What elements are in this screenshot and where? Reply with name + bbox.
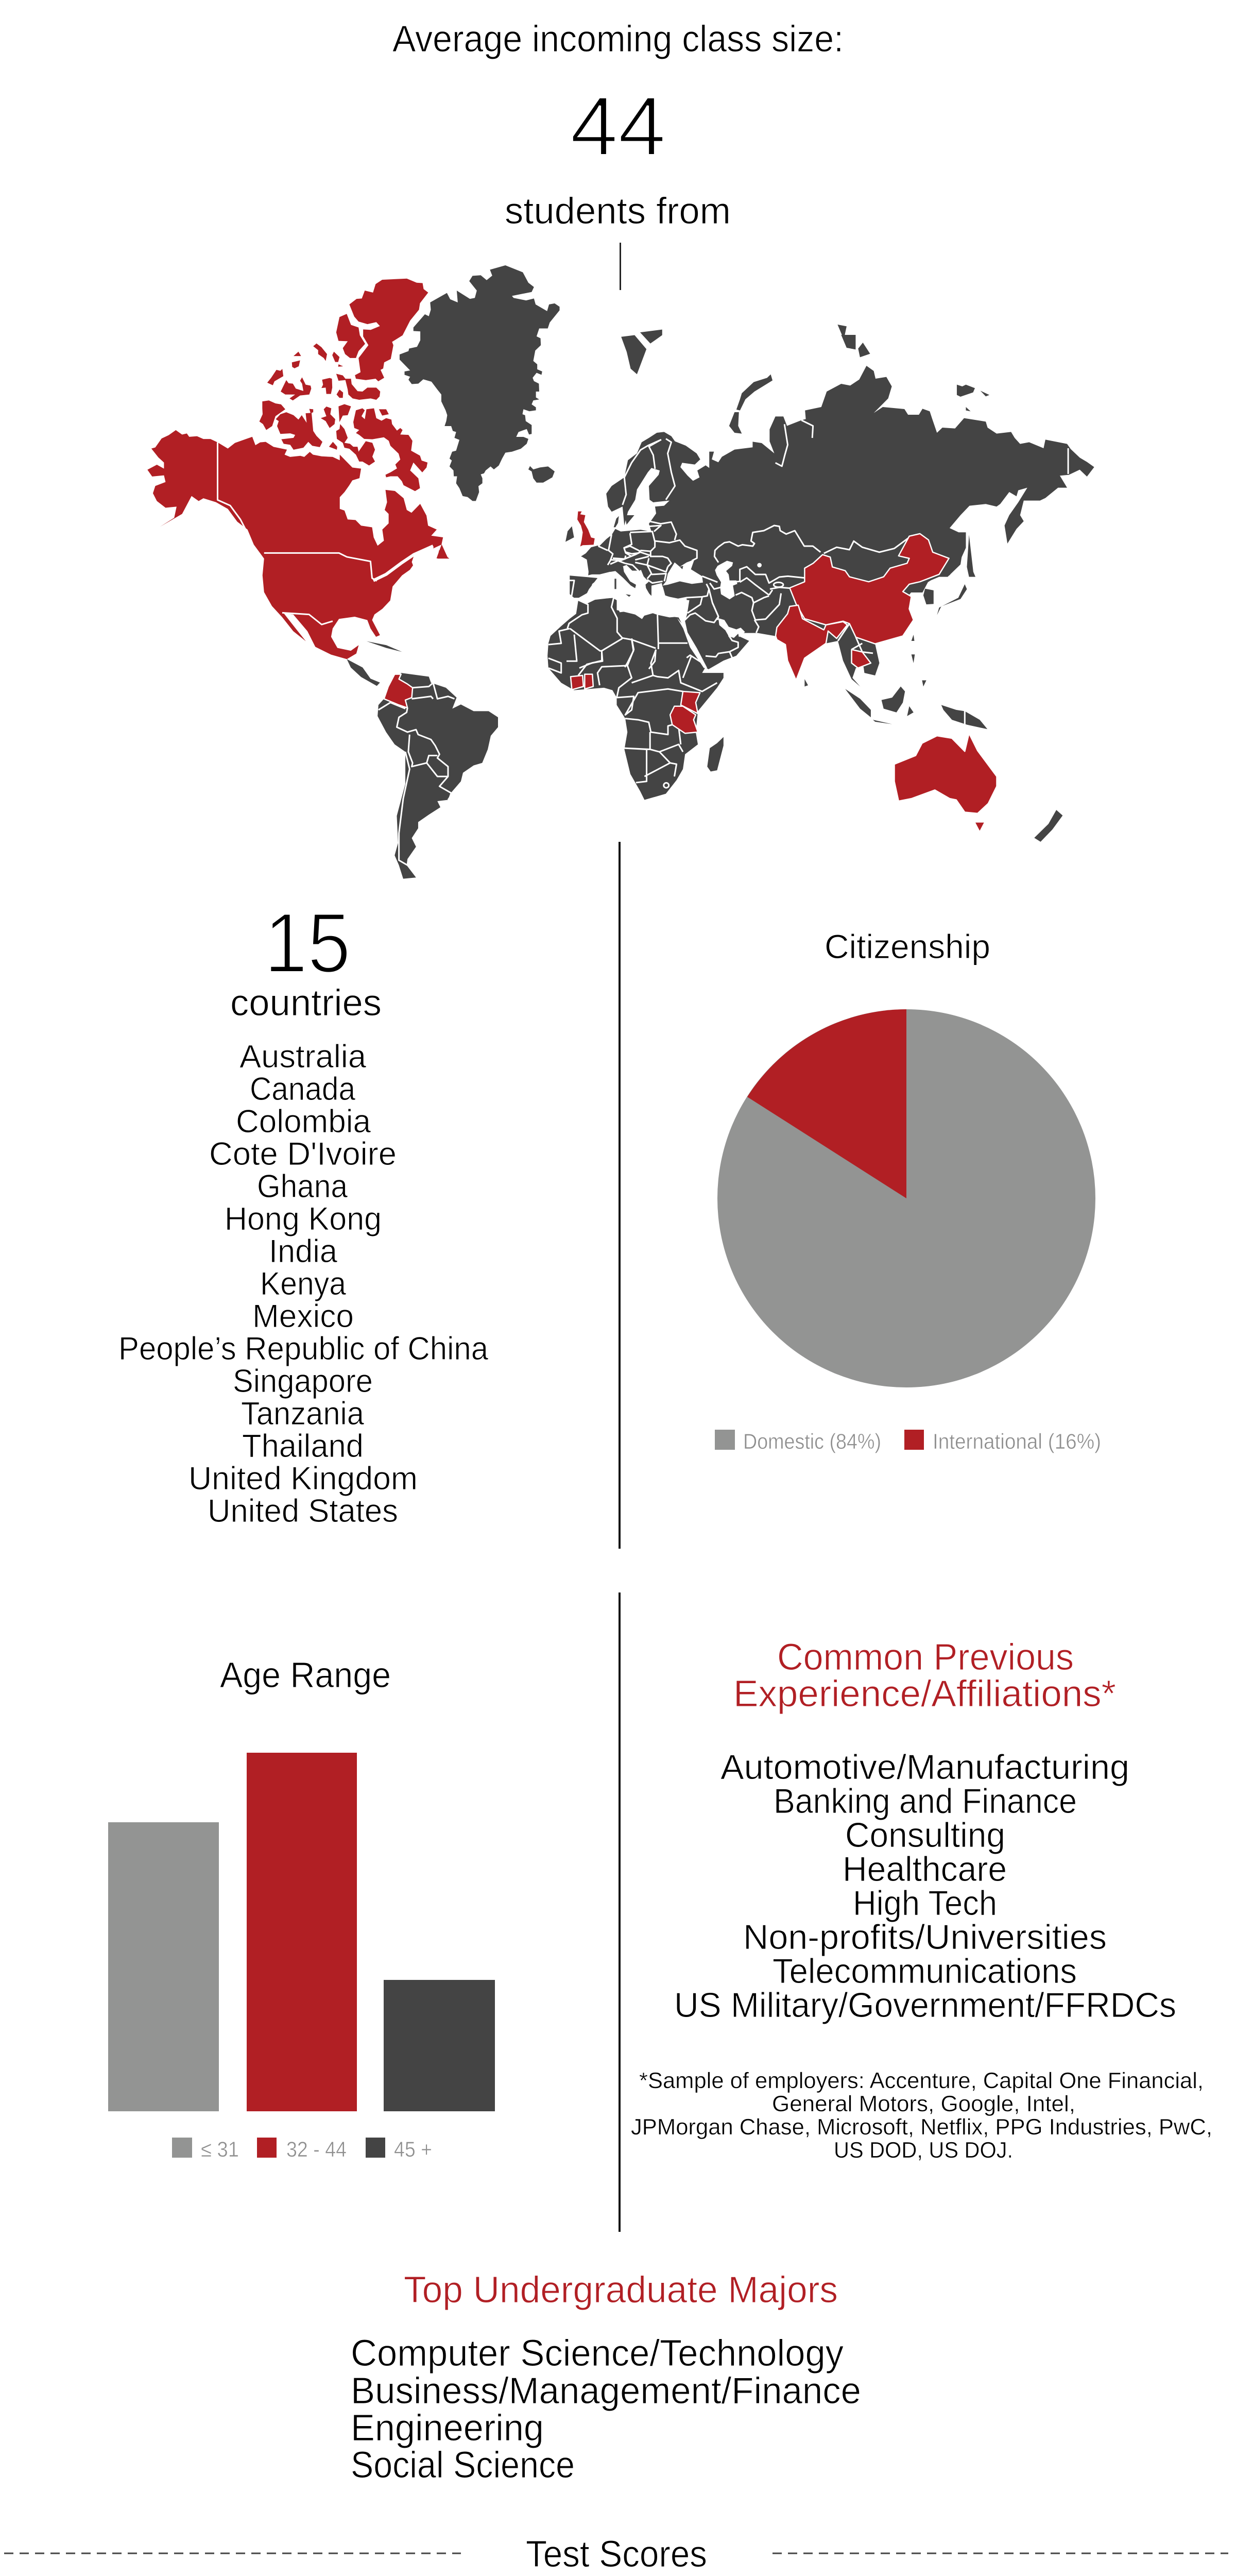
list of countries: Kenya bbox=[260, 1266, 347, 1302]
number: 44 students: 44 bbox=[570, 79, 666, 173]
list of countries: Colombia bbox=[236, 1104, 371, 1140]
map: europe, mediterranean and middle east bbox=[566, 515, 820, 669]
list of majors bbox=[351, 2333, 861, 2486]
footnote: sample of employers: *Sample of employers: Accenture, Capital One Financial, bbox=[639, 2068, 1204, 2093]
list of industries: Telecommunications bbox=[772, 1952, 1077, 1991]
map: north america bbox=[147, 330, 1062, 842]
list of countries: Hong Kong bbox=[225, 1201, 382, 1237]
list of countries: Ghana bbox=[257, 1168, 348, 1205]
heading: common previous experience: Common Previous bbox=[777, 1637, 1074, 1678]
footnote: sample of employers: JPMorgan Chase, Microsoft, Netflix, PPG Industries, PwC, bbox=[631, 2114, 1212, 2140]
bar chart: age range bbox=[108, 1753, 495, 2111]
list of industries bbox=[674, 1748, 1176, 2025]
legend: age range: 32 - 44 bbox=[286, 2137, 347, 2161]
panel: age range bbox=[108, 1655, 495, 2161]
list of countries: Australia bbox=[239, 1039, 367, 1075]
panel: countries bbox=[118, 895, 489, 1529]
list of majors: Social Science bbox=[351, 2445, 575, 2486]
number: 15 countries: 15 bbox=[264, 895, 351, 990]
list of industries: Healthcare bbox=[843, 1850, 1007, 1889]
pie chart: citizenship bbox=[717, 1009, 1095, 1387]
vertical divider between age and experience bbox=[619, 1592, 621, 2232]
list of countries: Thailand bbox=[242, 1428, 364, 1464]
map: south america, africa, south asia, australia bbox=[373, 527, 997, 879]
connector line under map bbox=[619, 842, 621, 1549]
list of industries: Automotive/Manufacturing bbox=[720, 1748, 1129, 1787]
list of majors: Business/Management/Finance bbox=[351, 2370, 861, 2412]
list of majors: Engineering bbox=[351, 2408, 544, 2449]
list of countries: Canada bbox=[250, 1071, 356, 1107]
heading: age range: Age Range bbox=[220, 1655, 391, 1695]
heading: test scores with dashed rules: Test Scores bbox=[526, 2534, 707, 2575]
text: countries: countries bbox=[230, 982, 382, 1024]
panel: previous experience bbox=[631, 1637, 1212, 2163]
list of countries: People’s Republic of China bbox=[118, 1331, 489, 1367]
legend: citizenship: International (16%) bbox=[933, 1429, 1101, 1453]
list of countries: Tanzania bbox=[241, 1396, 365, 1432]
footnote: sample of employers: US DOD, US DOJ. bbox=[834, 2138, 1013, 2163]
footnote: sample of employers: General Motors, Google, Intel, bbox=[772, 2091, 1075, 2116]
connector line above map bbox=[620, 243, 621, 290]
heading: top undergraduate majors: Top Undergraduate Majors bbox=[404, 2269, 838, 2311]
list of industries: Consulting bbox=[845, 1816, 1005, 1855]
list of countries: United States bbox=[208, 1493, 398, 1529]
list of countries: United Kingdom bbox=[188, 1461, 418, 1497]
heading: common previous experience bbox=[733, 1637, 1116, 1715]
list of industries: High Tech bbox=[853, 1884, 997, 1923]
map: greenland and canadian arctic bbox=[260, 265, 560, 501]
list of countries: Mexico bbox=[252, 1298, 354, 1334]
list of majors: Computer Science/Technology bbox=[351, 2333, 844, 2374]
list of countries: Cote D'Ivoire bbox=[209, 1136, 397, 1172]
list of industries: US Military/Government/FFRDCs bbox=[674, 1986, 1176, 2025]
footnote: sample of employers bbox=[631, 2068, 1212, 2163]
list of industries: Non-profits/Universities bbox=[743, 1918, 1107, 1957]
text: students from: students from bbox=[505, 191, 731, 232]
legend: citizenship bbox=[715, 1429, 1101, 1453]
heading: average incoming class size: Average incoming class size: bbox=[392, 19, 844, 60]
list of countries: Singapore bbox=[233, 1363, 373, 1399]
list of countries bbox=[118, 1039, 489, 1529]
heading: common previous experience: Experience/Affiliations* bbox=[733, 1673, 1116, 1715]
legend: age range: ≤ 31 bbox=[201, 2137, 239, 2161]
legend: citizenship: Domestic (84%) bbox=[743, 1429, 881, 1453]
map: eurasia north and russia bbox=[577, 325, 1094, 592]
legend: age range bbox=[172, 2137, 432, 2161]
legend: age range: 45 + bbox=[394, 2137, 432, 2161]
list of industries: Banking and Finance bbox=[774, 1782, 1077, 1821]
list of countries: India bbox=[269, 1233, 338, 1269]
panel: citizenship bbox=[715, 927, 1101, 1453]
world map bbox=[147, 265, 1094, 879]
heading: citizenship: Citizenship bbox=[825, 927, 990, 965]
